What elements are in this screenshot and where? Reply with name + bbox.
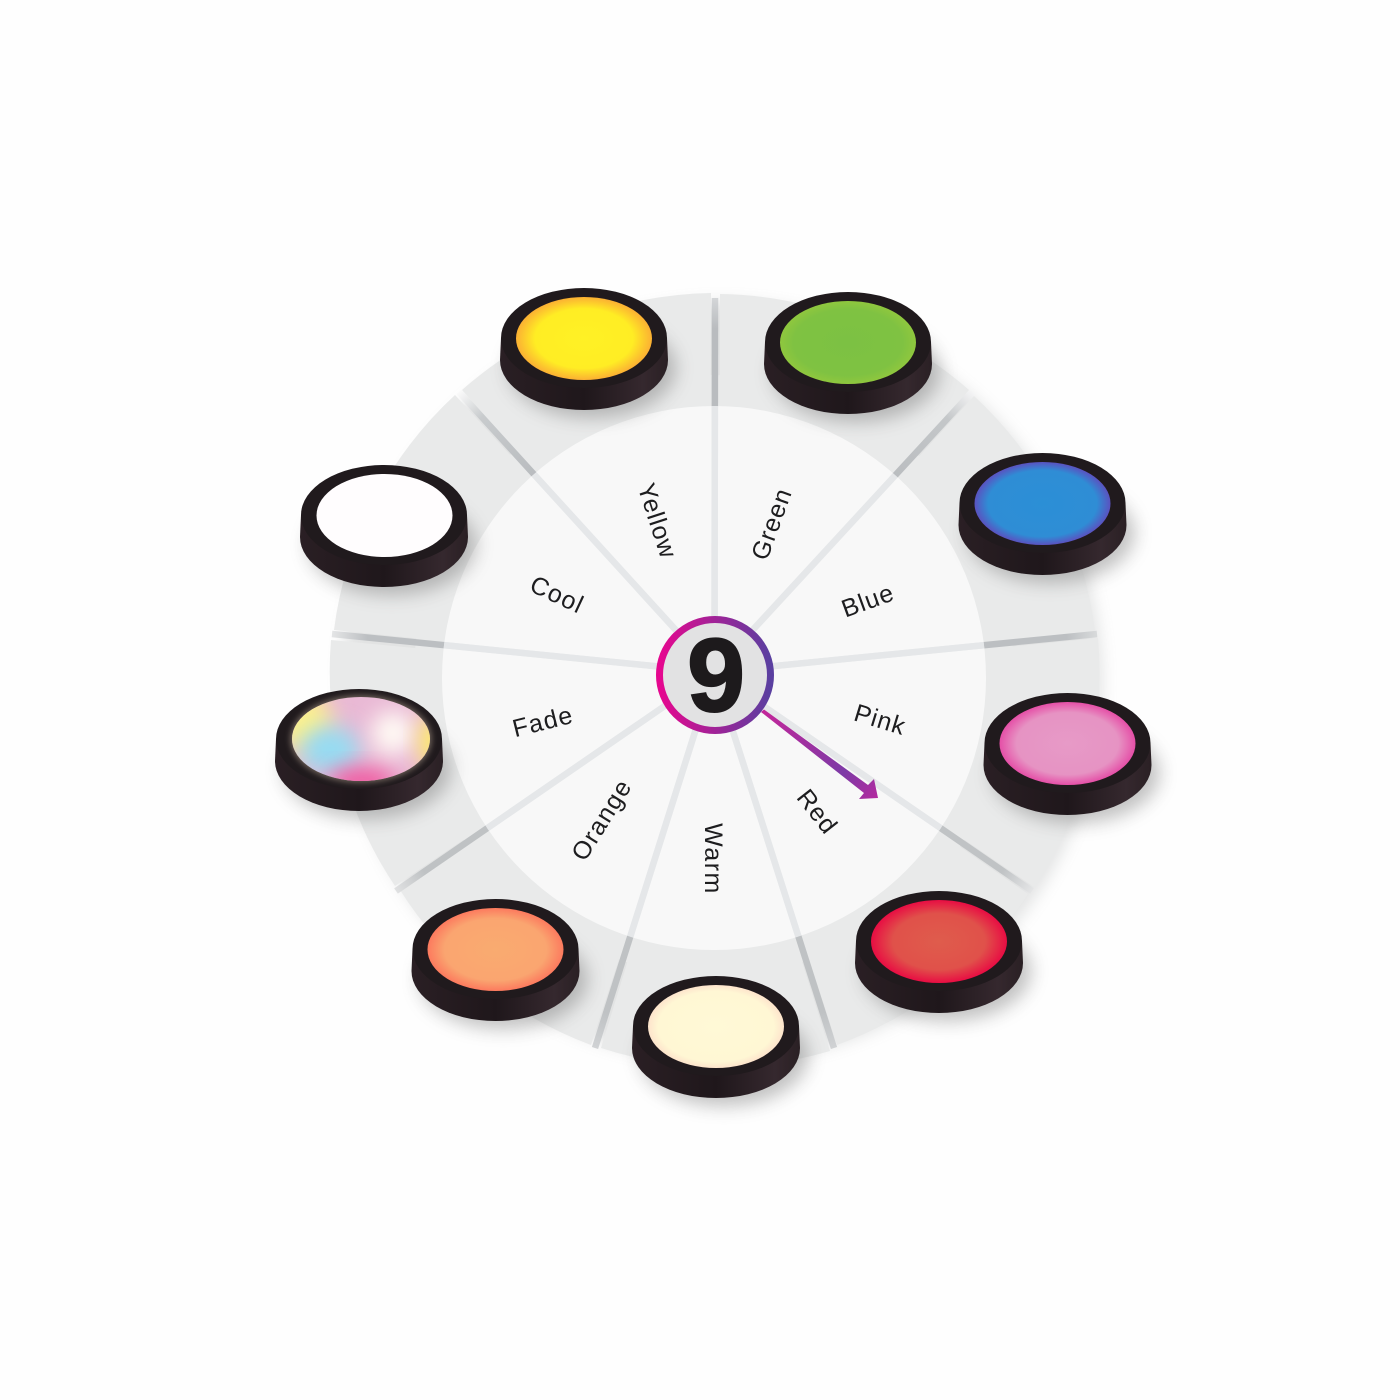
label: Green: Green: [746, 484, 798, 564]
button: Green: [764, 292, 940, 422]
number 9: 9: [687, 618, 745, 734]
label: Blue: Blue: [838, 579, 898, 623]
label: Cool: Cool: [526, 570, 588, 620]
center hub with number: [656, 616, 774, 734]
button: Cool: [300, 465, 476, 595]
label: Yellow: Yellow: [632, 480, 682, 562]
button: Fade: [272, 689, 451, 819]
inner disc: [442, 406, 986, 950]
label: Warm: Warm: [699, 823, 727, 895]
arrow: [761, 710, 878, 799]
label: Fade: Fade: [510, 701, 576, 743]
wheel base: [330, 293, 1102, 1067]
label: Red: Red: [791, 784, 843, 840]
button: Yellow: [500, 288, 676, 418]
button: Warm: [632, 976, 808, 1106]
button: Blue: [958, 453, 1134, 583]
button: Red: [855, 891, 1031, 1021]
button: Pink: [984, 693, 1160, 823]
button: Orange: [412, 899, 588, 1029]
label: Pink: Pink: [851, 699, 909, 741]
label: Orange: Orange: [566, 774, 638, 866]
outer sectors: [330, 293, 1100, 1067]
wheel shadow: [342, 302, 1102, 1062]
sector dividers: [332, 298, 1097, 1048]
